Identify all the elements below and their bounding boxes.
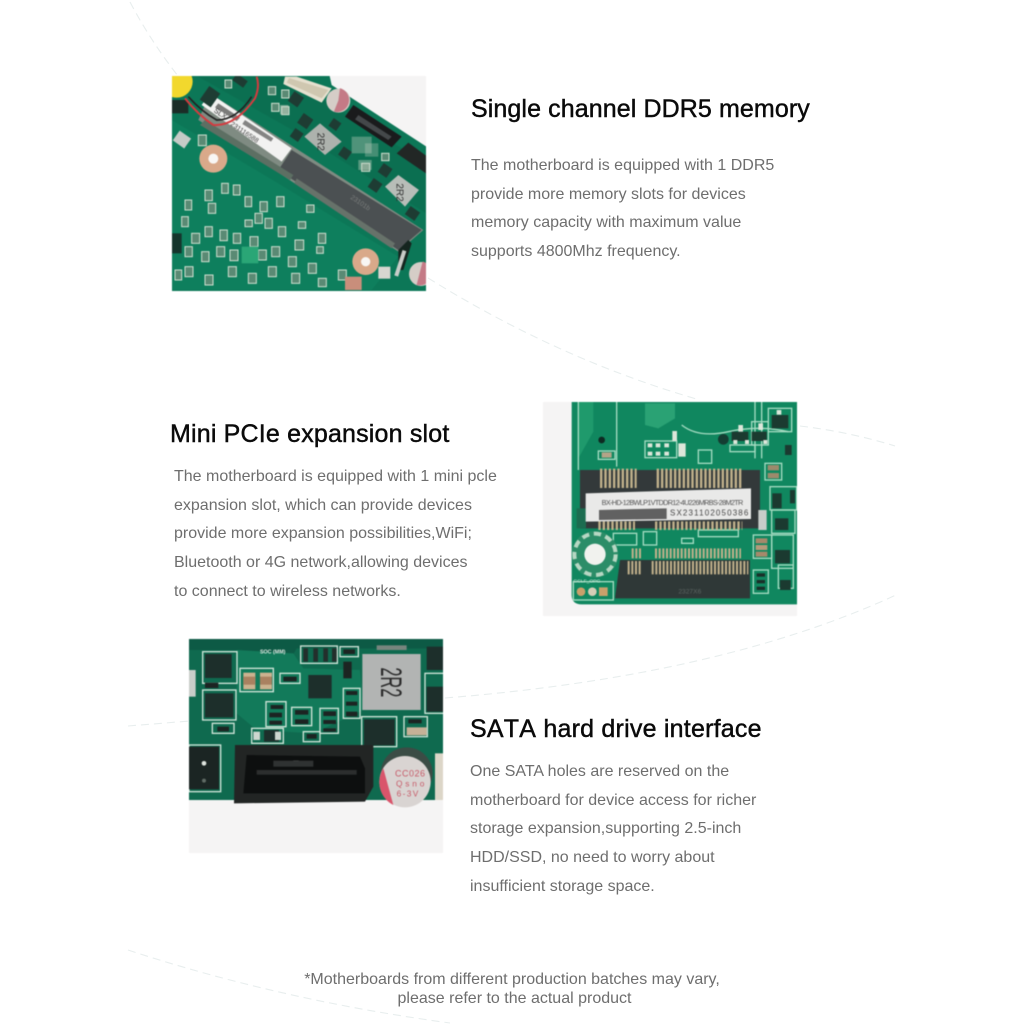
text: Mini PCIe description (174, 468, 497, 600)
text: Mini PCIe description: The motherboard is equipped with 1 mini pcle (174, 468, 497, 485)
mounting ring (572, 531, 618, 578)
electrolytic capacitor (379, 747, 433, 807)
socket label: BX-HD-12BWLP1VTDDR12-4U226MRBS-28M2TR (602, 498, 743, 507)
mounting holes (199, 145, 227, 173)
pin header (397, 143, 428, 175)
pads (577, 587, 585, 596)
photo: mini PCIe slot on motherboard: 2327X6 (678, 589, 702, 596)
footnote: please refer to the actual product (398, 990, 631, 1007)
text: DDR5 description (471, 157, 774, 260)
text: DDR5 description: provide more memory slots for devices (471, 186, 746, 203)
battery (161, 66, 193, 98)
inductor 2R2 (362, 654, 421, 710)
text: SATA description: One SATA holes are reserved on the (470, 763, 729, 780)
SATA port (345, 105, 402, 147)
inductor 2R2: 2R2 (374, 667, 407, 697)
socket label: SLX (212, 106, 229, 121)
text: SATA description (470, 763, 756, 895)
chips (283, 77, 332, 103)
photo: DDR5 memory slot on motherboard: 23101b (349, 194, 371, 213)
SATA port (234, 745, 373, 803)
mini PCIe upper socket (580, 470, 760, 528)
photo: SATA port on motherboard (188, 638, 444, 852)
ceramic capacitors (243, 673, 255, 689)
footnote (304, 971, 720, 1007)
photo: DDR5 memory slot on motherboard: 2R2 (315, 133, 326, 151)
memory socket (198, 93, 423, 252)
text: Mini PCIe description: Bluetooth or 4G network,allowing devices (174, 554, 468, 571)
text: DDR5 description: supports 4800Mhz frequency. (471, 243, 681, 260)
socket label: 231116588 (229, 121, 260, 145)
text: Mini PCIe description: expansion slot, which can provide devices (174, 497, 472, 514)
wires (185, 77, 258, 125)
socket label: SX231102050386 (670, 509, 749, 518)
photo: DDR5 memory slot on motherboard: 2R2 (394, 183, 405, 202)
socket label (202, 93, 292, 162)
photo: mini PCIe slot on motherboard (544, 401, 798, 616)
dark IC chips (205, 647, 445, 745)
jumper (189, 747, 219, 789)
inductors (304, 123, 342, 155)
text: SATA description: storage expansion,supporting 2.5-inch (470, 820, 741, 837)
text: DDR5 description: The motherboard is equipped with 1 DDR5 (471, 157, 774, 174)
photo: DDR5 memory slot on motherboard (171, 75, 427, 292)
heading: Mini PCIe: Mini PCIe expansion slot (170, 420, 449, 448)
heading: SATA: SATA hard drive interface (470, 715, 762, 743)
text: Mini PCIe description: to connect to wireless networks. (174, 583, 401, 600)
small chips (732, 415, 795, 590)
capacitors (326, 89, 350, 113)
electrolytic capacitor: Qsno (396, 779, 425, 789)
mini PCIe lower socket (615, 560, 750, 598)
electrolytic capacitor: CC026 (395, 769, 425, 779)
text: Mini PCIe description: provide more expansion possibilities,WiFi; (174, 525, 472, 542)
text: DDR5 description: memory capacity with maximum value (471, 214, 741, 231)
small passive components (205, 649, 422, 739)
photo: mini PCIe slot on motherboard: GCLF_OPG (573, 578, 601, 584)
heading: DDR5: Single channel DDR5 memory (471, 95, 810, 123)
text: SATA description: HDD/SSD, no need to worry about (470, 849, 715, 866)
photo: SATA port on motherboard: SOC (MM) (260, 649, 286, 655)
text: SATA description: motherboard for device access for richer (470, 792, 756, 809)
text: SATA description: insufficient storage space. (470, 878, 655, 895)
electrolytic capacitor: 6-3V (397, 789, 419, 799)
socket label (586, 488, 751, 522)
footnote: *Motherboards from different production batches may vary, (304, 971, 720, 988)
